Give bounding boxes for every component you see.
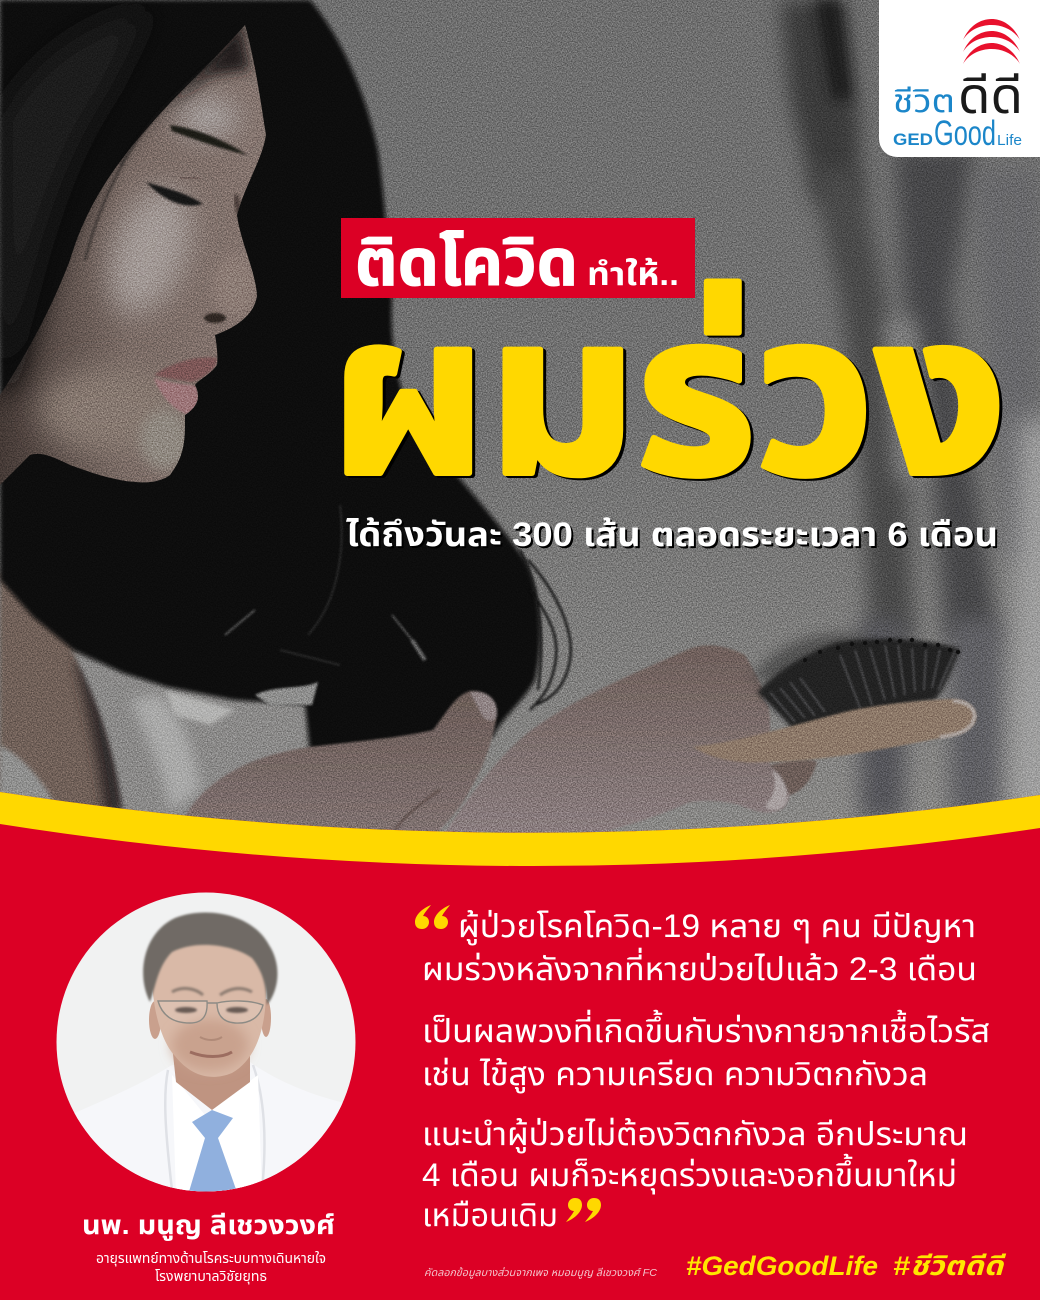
logo thai wordmark: ดีดี [958, 68, 1023, 124]
paragraph 2: เป็นผลพวงที่เกิดขึ้นกับร่างกายจากเชื้อไวรัส [422, 1009, 990, 1049]
icon: closing quote [566, 1198, 601, 1222]
paragraph 3 [422, 1116, 968, 1233]
doctor name: นพ. มนูญ ลีเชวงวงศ์ [82, 1210, 335, 1241]
film grain [0, 0, 1040, 840]
lips [154, 357, 217, 382]
heading tag [341, 218, 695, 299]
heading tag: ติดโควิด [355, 225, 578, 299]
logo english wordmark: GED [893, 130, 933, 149]
nostril [204, 313, 226, 323]
brows and eyes [172, 988, 252, 1013]
hashtags: #GedGoodLife [686, 1251, 878, 1281]
paragraph 3: เหมือนเดิม [422, 1197, 558, 1233]
brow [170, 125, 247, 155]
paragraph 1: ผู้ป่วยโรคโควิด-19 หลาย ๆ คน มีปัญหา [458, 908, 976, 946]
hashtags [686, 1251, 1007, 1281]
paragraph 2 [422, 1009, 990, 1094]
logo english wordmark: Good [934, 114, 996, 153]
nose [200, 1037, 222, 1040]
face [0, 25, 266, 484]
heading tag: ทำให้.. [587, 256, 679, 292]
main headline: ผมร่วง [333, 271, 1009, 523]
brush handle [693, 699, 976, 762]
hair brush [693, 633, 976, 762]
bristle mass [757, 639, 960, 732]
bristle tips [803, 638, 960, 662]
logo thai wordmark [893, 68, 1023, 124]
grey hair [143, 912, 277, 1005]
neck [173, 1054, 250, 1110]
doctor title: อายุรแพทย์ทางด้านโรคระบบทางเดินหายใจ [96, 1250, 326, 1267]
hair strands over forehead [85, 45, 235, 260]
tangled hair on brush [750, 633, 870, 685]
light patch of top between hair [255, 682, 318, 705]
icon: opening quote [415, 905, 450, 929]
logo [879, 0, 1040, 157]
bristle pins [762, 645, 955, 722]
logo arcs [963, 19, 1020, 64]
main headline: ผมร่วง [330, 269, 1006, 521]
sub headline: ได้ถึงวันละ 300 เส้น ตลอดระยะเวลา 6 เดือน [346, 516, 998, 554]
white top [70, 650, 305, 810]
paragraph 1 [422, 908, 977, 987]
quote text [422, 908, 990, 1233]
shoulder skin [0, 576, 111, 807]
paragraph 2: เช่น ไข้สูง ความเครียด ความวิตกกังวล [422, 1056, 928, 1094]
photo: woman looking at hair loss on a brush [0, 0, 1040, 840]
white coat [74, 1102, 343, 1192]
doctor title [96, 1250, 326, 1285]
red lower panel [0, 824, 1040, 1300]
glasses [158, 1001, 263, 1023]
logo english wordmark [893, 114, 1022, 153]
sub headline: ได้ถึงวันละ 300 เส้น ตลอดระยะเวลา 6 เดือน [348, 518, 1000, 556]
tie [188, 1110, 238, 1195]
soft shadow along the hairline [0, 10, 245, 400]
hair [0, 0, 540, 752]
paragraph 3: แนะนำผู้ป่วยไม่ต้องวิตกกังวล อีกประมาณ [422, 1116, 968, 1154]
logo thai wordmark: ชีวิต [893, 83, 955, 119]
hand holding brush [440, 645, 817, 840]
paragraph 1: ผมร่วงหลังจากที่หายป่วยไปแล้ว 2-3 เดือน [422, 947, 977, 987]
loose hair strands [520, 550, 571, 710]
face [152, 931, 266, 1077]
hand holding hair [180, 691, 497, 835]
hashtags: #ชีวิตดีดี [893, 1251, 1007, 1281]
doctor title: โรงพยาบาลวิชัยยุทธ [155, 1268, 267, 1285]
doctor portrait [56, 892, 356, 1200]
yellow curved band [0, 792, 1040, 866]
ears [149, 1001, 161, 1039]
mouth [190, 1052, 232, 1056]
curtain on the right [780, 0, 1040, 820]
hair sheen on the left side [0, 10, 150, 370]
logo english wordmark: Life [997, 132, 1022, 149]
source credit: คัดลอกข้อมูลบางส่วนจากเพจ หมอมนูญ ลีเชวงวงศ์ FC [424, 1267, 657, 1279]
hair highlights [225, 505, 425, 665]
paragraph 3: 4 เดือน ผมก็จะหยุดร่วงและงอกขึ้นมาใหม่ [422, 1153, 957, 1194]
eye [146, 182, 203, 206]
shirt [172, 1075, 262, 1195]
